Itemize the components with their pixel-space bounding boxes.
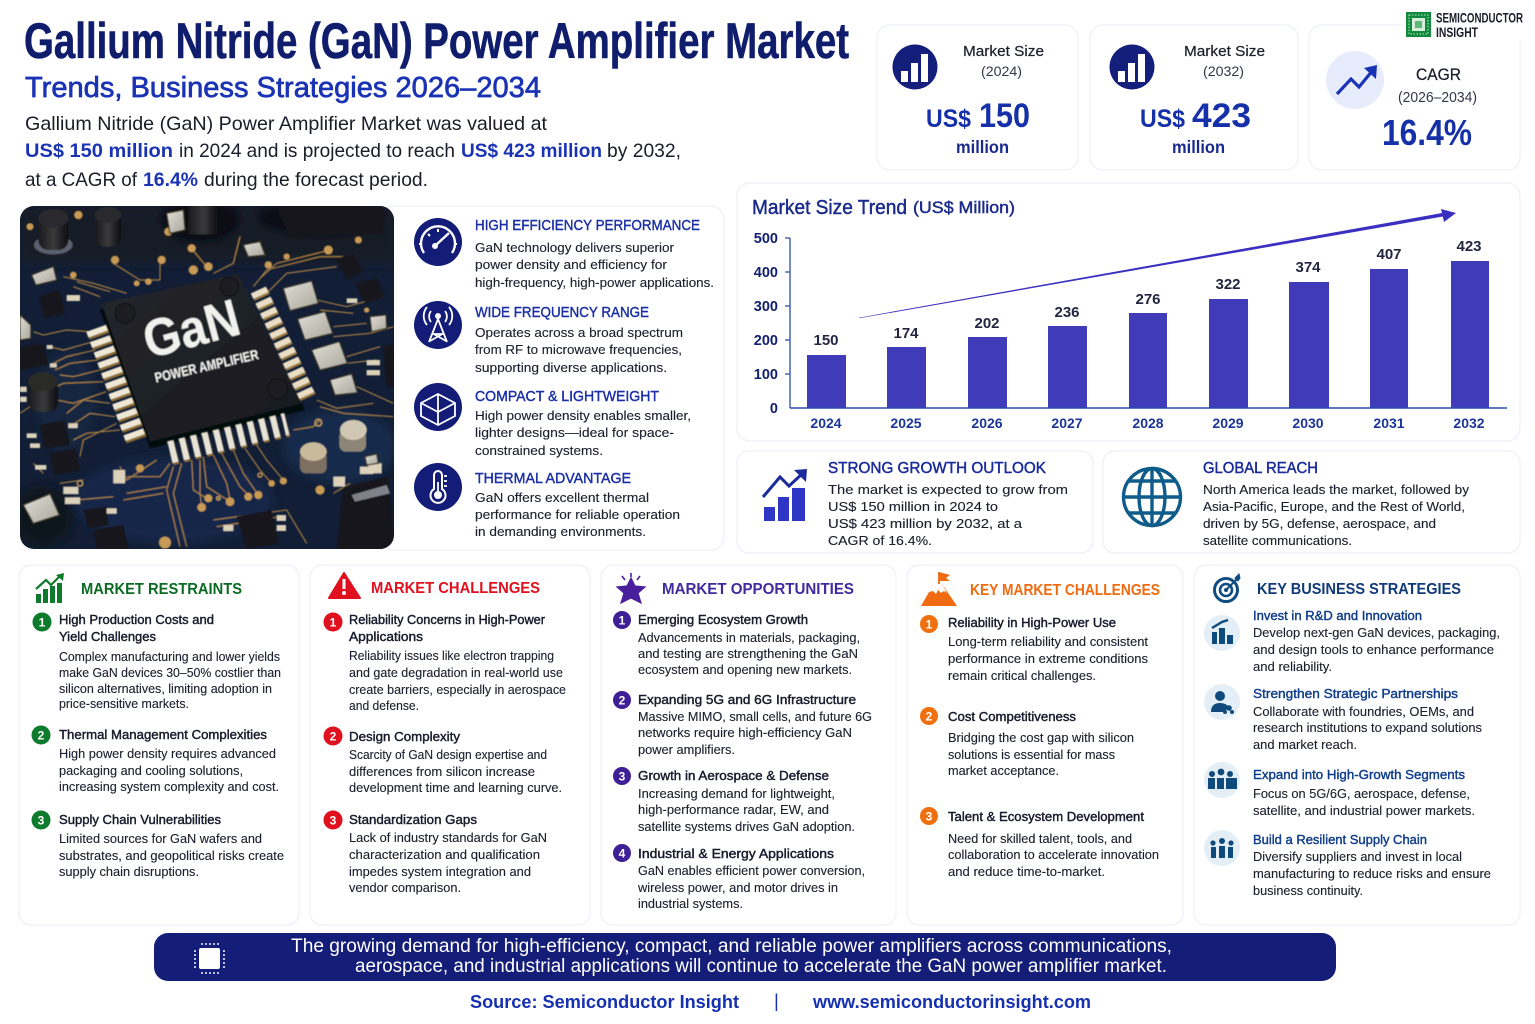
item 2: Scarcity of GaN design expertise and	[349, 747, 547, 762]
item 1: Advancements in materials, packaging,	[638, 630, 860, 645]
item: segments: satellite, and industrial power markets.	[1253, 803, 1475, 818]
value	[1140, 97, 1251, 135]
year labels: 2028	[1132, 415, 1164, 431]
body: The market is expected to grow from	[828, 482, 1068, 497]
item 1: Applications	[349, 629, 424, 644]
item 1: Long-term reliability and consistent	[948, 634, 1148, 649]
item: invest in R&D: Invest in R&D and Innovation	[1253, 608, 1422, 623]
feature: thermal: THERMAL ADVANTAGE	[475, 471, 631, 487]
item 2	[613, 691, 872, 757]
item 1	[32, 612, 281, 711]
panel: market opportunities	[601, 565, 896, 925]
footer source: Source: Semiconductor Insight	[470, 991, 739, 1012]
body	[1203, 482, 1470, 548]
period: (2026–2034)	[1398, 90, 1477, 106]
label: Market Size	[1184, 43, 1265, 60]
item: supply chain: manufacturing to reduce risks and ensure	[1253, 866, 1491, 881]
panel: key market challenges	[907, 565, 1183, 925]
feature: compact: lighter designs—ideal for space-	[475, 425, 674, 440]
item 3: satellite systems drives GaN adoption.	[638, 819, 855, 834]
feature: high efficiency: HIGH EFFICIENCY PERFORMANCE	[475, 218, 700, 234]
item 3: Increasing demand for lightweight,	[638, 786, 835, 801]
icon: partnerships	[1204, 684, 1240, 720]
intro text: Gallium Nitride (GaN) Power Amplifier Market was valued at	[25, 113, 548, 135]
year: (2032)	[1203, 64, 1244, 79]
item 2: solutions is essential for mass	[948, 747, 1115, 762]
icon: star	[617, 573, 645, 603]
item 1: Reliability in High-Power Use	[948, 615, 1116, 630]
traces	[20, 237, 393, 547]
year labels: 2032	[1453, 415, 1485, 431]
item: invest in R&D: and reliability.	[1253, 659, 1332, 674]
item 1: High Production Costs and	[59, 612, 214, 627]
value labels: 174	[893, 325, 919, 342]
chip label: POWER AMPLIFIER	[153, 346, 260, 386]
icon: chip	[194, 943, 225, 974]
item 3: Need for skilled talent, tools, and	[948, 831, 1132, 846]
value labels: 374	[1295, 259, 1321, 276]
item 3: impedes system integration and	[349, 864, 531, 879]
item 1: 1	[619, 614, 626, 628]
feature: thermal: in demanding environments.	[475, 524, 646, 539]
body: Asia-Pacific, Europe, and the Rest of World,	[1203, 499, 1465, 514]
value: 150	[979, 97, 1030, 135]
item 2: Expanding 5G and 6G Infrastructure	[638, 692, 856, 707]
item 2: Massive MIMO, small cells, and future 6G	[638, 709, 872, 724]
chart title	[752, 197, 1015, 219]
item 4: wireless power, and motor drives in	[637, 880, 838, 895]
icon: growth bars	[763, 469, 807, 521]
item 1: Reliability issues like electron trapping	[349, 648, 554, 663]
panel: market challenges	[310, 565, 590, 925]
panel: strong growth outlook	[737, 451, 1093, 553]
icon: rising arrow	[1326, 51, 1384, 109]
body: satellite communications.	[1203, 533, 1352, 548]
feature: thermal	[475, 471, 680, 539]
item 3: characterization and qualification	[349, 847, 540, 862]
item 3: Standardization Gaps	[349, 812, 478, 827]
feature: thermal: GaN offers excellent thermal	[475, 490, 649, 505]
item 3	[32, 810, 284, 879]
item 3	[920, 807, 1159, 879]
pins shadow	[97, 331, 137, 442]
item 1: Emerging Ecosystem Growth	[638, 612, 808, 627]
intro text: at a CAGR of	[25, 169, 138, 191]
item: partnerships: and market reach.	[1253, 737, 1357, 752]
feature: compact: constrained systems.	[475, 443, 603, 458]
item 1: 1	[39, 616, 46, 630]
y axis: 300	[754, 299, 778, 315]
label: CAGR	[1416, 65, 1461, 84]
value labels: 407	[1376, 246, 1402, 263]
item: segments: Focus on 5G/6G, aerospace, defense,	[1253, 786, 1470, 801]
trend arrow	[859, 209, 1456, 318]
intro text	[25, 113, 681, 191]
feature: high efficiency	[475, 218, 714, 290]
item 3	[324, 810, 547, 895]
value	[926, 97, 1030, 135]
body: CAGR of 16.4%.	[828, 533, 932, 548]
value labels: 202	[974, 315, 1000, 332]
chip shadow	[100, 309, 305, 449]
small dark chips	[20, 207, 395, 549]
body: US$ 423 million by 2032, at a	[828, 516, 1023, 531]
item 3: vendor comparison.	[349, 880, 461, 895]
footer source	[470, 990, 1091, 1012]
item 2: power amplifiers.	[638, 742, 735, 757]
icon: green chip	[1406, 12, 1431, 37]
item 1: make GaN devices 30–50% costlier than	[59, 665, 281, 680]
item 4: 4	[619, 846, 626, 860]
item: segments: Expand into High-Growth Segments	[1253, 767, 1466, 782]
item 2: differences from silicon increase	[349, 764, 535, 779]
panel: key features	[380, 206, 724, 550]
ring pads	[77, 419, 322, 500]
item 1: Reliability Concerns in High-Power	[349, 612, 546, 627]
banner text	[291, 936, 1172, 977]
item 1	[920, 615, 1148, 683]
item 3: Lack of industry standards for GaN	[349, 830, 547, 845]
item 1: Complex manufacturing and lower yields	[59, 649, 280, 664]
year labels: 2025	[890, 415, 922, 431]
item 2: networks require high-efficiency GaN	[638, 725, 852, 740]
year: (2024)	[981, 64, 1022, 79]
silver highlight on large block	[352, 485, 390, 502]
silver components	[20, 210, 387, 523]
value labels: 322	[1215, 276, 1241, 293]
heading: MARKET CHALLENGES	[371, 580, 540, 597]
intro text: 16.4%	[143, 169, 198, 191]
icon: cube	[414, 383, 462, 431]
footer source: |	[774, 990, 779, 1011]
item 1: silicon alternatives, limiting adoption in	[59, 681, 272, 696]
feature: compact: COMPACT & LIGHTWEIGHT	[475, 389, 659, 405]
item 1	[613, 611, 860, 677]
body: US$ 150 million in 2024 to	[828, 499, 998, 514]
item 2: development time and learning curve.	[349, 780, 562, 795]
item 2: market acceptance.	[948, 763, 1059, 778]
intro text: during the forecast period.	[204, 169, 428, 191]
y axis: 400	[754, 265, 778, 281]
body: North America leads the market, followed by	[1203, 482, 1470, 497]
item: supply chain: Build a Resilient Supply Chain	[1253, 832, 1427, 847]
subtitle: Trends, Business Strategies 2026–2034	[25, 72, 541, 104]
feature: high efficiency: power density and efficiency for	[475, 257, 668, 272]
y axis: 0	[770, 401, 778, 417]
item 1: performance in extreme conditions	[948, 651, 1148, 666]
item 3: high-performance radar, EW, and	[638, 802, 829, 817]
icon: antenna tower	[414, 301, 462, 349]
label: Market Size	[963, 43, 1044, 60]
logo text: INSIGHT	[1436, 25, 1479, 40]
heading: MARKET OPPORTUNITIES	[662, 581, 854, 598]
item 2	[32, 726, 279, 794]
item: partnerships	[1253, 686, 1482, 752]
value: 16.4%	[1382, 112, 1472, 153]
year labels: 2031	[1373, 415, 1405, 431]
banner	[154, 933, 1336, 981]
chart title: (US$ Million)	[913, 198, 1015, 217]
item 2: 2	[38, 728, 45, 742]
value: US$	[926, 105, 971, 133]
bar chart	[807, 261, 1489, 408]
value labels	[813, 238, 1482, 349]
icon: bar chart	[892, 44, 938, 90]
body	[828, 482, 1068, 548]
item 3: supply chain disruptions.	[59, 864, 199, 879]
icon: green growth chart	[36, 573, 64, 603]
logo	[1403, 8, 1530, 40]
item 3: 3	[38, 814, 45, 828]
item 3: substrates, and geopolitical risks create	[59, 848, 284, 863]
panel: key business strategies	[1194, 565, 1520, 925]
item: partnerships: research institutions to expand solutions	[1253, 720, 1482, 735]
item 2: packaging and cooling solutions,	[59, 763, 243, 778]
item 2: Cost Competitiveness	[948, 709, 1076, 724]
item 3: Supply Chain Vulnerabilities	[59, 812, 222, 827]
y axis: 500	[754, 231, 778, 247]
item 4: industrial systems.	[638, 896, 743, 911]
KPI card: market size 2024	[877, 25, 1078, 170]
heading: KEY BUSINESS STRATEGIES	[1257, 581, 1461, 598]
item: supply chain	[1253, 832, 1491, 898]
year labels: 2027	[1051, 415, 1083, 431]
value: 423	[1192, 97, 1251, 135]
item 1: 1	[330, 616, 337, 630]
image: GaN power amplifier chip on circuit board	[13, 197, 397, 549]
year labels	[810, 415, 1485, 431]
item 1: and testing are strengthening the GaN	[638, 646, 858, 661]
feature: wide frequency	[475, 305, 683, 375]
item: partnerships: Collaborate with foundries, OEMs, and	[1253, 704, 1474, 719]
item 3: 3	[619, 770, 626, 784]
chip label	[144, 298, 260, 384]
item 1: price-sensitive markets.	[59, 696, 189, 711]
KPI card: CAGR	[1309, 25, 1520, 170]
logo text	[1436, 10, 1523, 40]
intro text: US$ 423 million	[461, 140, 602, 162]
heading: GLOBAL REACH	[1203, 460, 1318, 477]
feature: wide frequency: WIDE FREQUENCY RANGE	[475, 305, 649, 321]
item 3	[613, 767, 855, 834]
item 2: Design Complexity	[349, 729, 461, 744]
item 1: create barriers, especially in aerospace	[349, 682, 566, 697]
y axis: 100	[754, 367, 778, 383]
y axis: 200	[754, 333, 778, 349]
item 2: Bridging the cost gap with silicon	[948, 730, 1134, 745]
item 4: Industrial & Energy Applications	[638, 846, 835, 861]
icon: segments	[1204, 762, 1240, 798]
title: Gallium Nitride (GaN) Power Amplifier Market	[24, 13, 849, 69]
pins	[96, 328, 136, 440]
y axis	[754, 231, 790, 417]
intro text: in 2024 and is projected to reach	[179, 140, 455, 162]
intro text: US$ 150 million	[25, 140, 173, 162]
unit: million	[1172, 137, 1225, 157]
item 3: collaboration to accelerate innovation	[948, 847, 1159, 862]
intro text: by 2032,	[607, 140, 681, 162]
value: US$	[1140, 105, 1185, 133]
item 2: 2	[926, 710, 933, 724]
icon: target	[1214, 574, 1240, 602]
feature: wide frequency: from RF to microwave frequencies,	[475, 342, 682, 357]
feature: wide frequency: supporting diverse applications.	[475, 360, 667, 375]
icon: R&D chart	[1204, 615, 1240, 651]
year labels: 2029	[1212, 415, 1244, 431]
item 2	[324, 726, 562, 795]
panel: market size trend chart	[737, 183, 1520, 441]
feature: high efficiency: GaN technology delivers superior	[475, 240, 675, 255]
item: segments	[1253, 767, 1475, 818]
year labels: 2024	[810, 415, 842, 431]
icon: mountain flag	[921, 572, 957, 606]
item 2: Thermal Management Complexities	[59, 727, 267, 742]
x axis	[790, 407, 1507, 409]
item 1: and gate degradation in real-world use	[349, 665, 563, 680]
item 1: 1	[926, 618, 933, 632]
small solder parts	[20, 295, 382, 531]
item 3: Growth in Aerospace & Defense	[638, 768, 829, 783]
item 1	[324, 612, 566, 713]
KPI card: market size 2032	[1090, 25, 1298, 170]
value labels: 423	[1456, 238, 1482, 255]
item 3: 3	[330, 814, 337, 828]
icon: supply chain	[1204, 830, 1240, 866]
feature: compact	[475, 389, 691, 458]
feature: wide frequency: Operates across a broad spectrum	[475, 325, 683, 340]
footer source: www.semiconductorinsight.com	[812, 991, 1091, 1012]
body: driven by 5G, defense, aerospace, and	[1203, 516, 1436, 531]
item: partnerships: Strengthen Strategic Partnerships	[1253, 686, 1459, 701]
item: invest in R&D	[1253, 608, 1500, 674]
icon: globe	[1124, 468, 1180, 526]
panel: market restraints	[19, 565, 299, 925]
item: invest in R&D: Develop next-gen GaN devices, packaging,	[1253, 625, 1500, 640]
item 2: High power density requires advanced	[59, 746, 276, 761]
item 2	[920, 707, 1134, 778]
banner text: aerospace, and industrial applications will continue to accelerate the GaN power amplifier market.	[355, 956, 1167, 977]
value labels: 150	[813, 332, 839, 349]
item 1: remain critical challenges.	[948, 668, 1096, 683]
feature: thermal: performance for reliable operation	[475, 507, 680, 522]
value labels: 236	[1054, 304, 1080, 321]
item: invest in R&D: and design tools to enhance performance	[1253, 642, 1494, 657]
banner text: The growing demand for high-efficiency, compact, and reliable power amplifiers across communications,	[291, 936, 1172, 957]
item 3: and reduce time-to-market.	[948, 864, 1105, 879]
icon: thermometer	[414, 463, 462, 511]
unit: million	[956, 137, 1009, 157]
item 1: ecosystem and opening new markets.	[638, 662, 852, 677]
icon: warning triangle	[329, 573, 360, 598]
item 1: and defense.	[349, 698, 419, 713]
item 1: Yield Challenges	[59, 629, 156, 644]
item 2: 2	[330, 730, 337, 744]
item: supply chain: business continuity.	[1253, 883, 1363, 898]
item 4	[613, 844, 865, 911]
item 3: 3	[926, 810, 933, 824]
value labels: 276	[1135, 291, 1161, 308]
panel: global reach	[1103, 451, 1520, 553]
chip label: GaN	[137, 288, 246, 370]
item 4: GaN enables efficient power conversion,	[638, 863, 865, 878]
heading: MARKET RESTRAINTS	[81, 581, 242, 598]
icon: bar chart	[1110, 44, 1154, 90]
icon: gauge	[414, 218, 462, 266]
year labels: 2026	[971, 415, 1003, 431]
capacitors	[28, 206, 367, 473]
item: supply chain: Diversify suppliers and invest in local	[1253, 849, 1462, 864]
year labels: 2030	[1292, 415, 1324, 431]
item 2: increasing system complexity and cost.	[59, 779, 279, 794]
chart title: Market Size Trend	[752, 197, 907, 219]
feature: compact: High power density enables smaller,	[475, 408, 691, 423]
item 2: 2	[619, 694, 626, 708]
blur blobs	[13, 197, 397, 547]
item 3: Limited sources for GaN wafers and	[59, 831, 262, 846]
feature: high efficiency: high-frequency, high-power applications.	[475, 275, 714, 290]
item 3: Talent & Ecosystem Development	[948, 809, 1144, 824]
chip body	[102, 274, 302, 442]
pads	[27, 211, 369, 549]
heading: KEY MARKET CHALLENGES	[970, 582, 1160, 599]
heading: STRONG GROWTH OUTLOOK	[828, 460, 1047, 477]
